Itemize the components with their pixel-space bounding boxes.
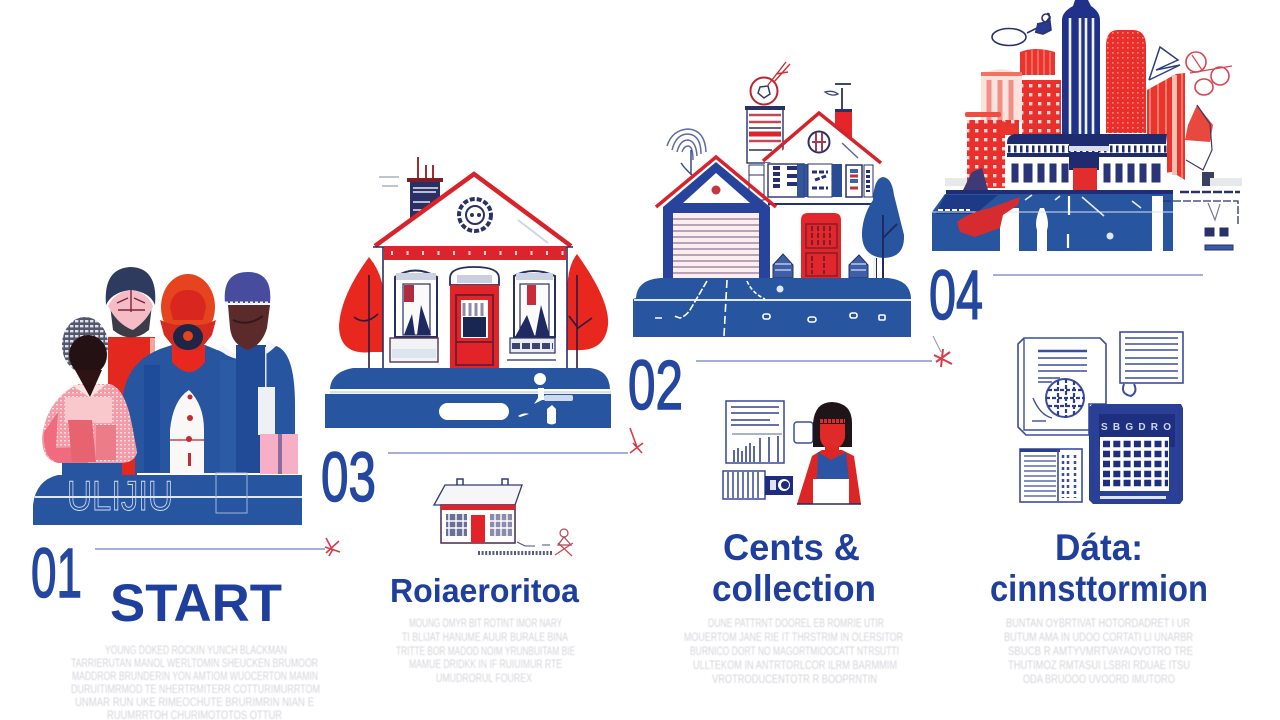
navy striped tower bbox=[1062, 0, 1100, 143]
red door bbox=[450, 267, 499, 369]
speech note bbox=[1120, 332, 1183, 396]
step 02 body text: BURNICO DORT NO MAGORTMIOOCATT NTRSUTTI bbox=[690, 646, 899, 658]
person: front left in pink jacket bbox=[42, 317, 137, 475]
left window bbox=[390, 270, 438, 362]
red splash bbox=[957, 197, 1020, 237]
connector 03 bbox=[388, 428, 643, 453]
right window bbox=[507, 271, 556, 360]
main house upper floor bbox=[763, 113, 881, 206]
grey horizon band bbox=[945, 178, 967, 186]
step 04 body text: BUNTAN OYBRTIVAT HOTORDADRET I UR bbox=[1006, 618, 1190, 630]
step 03 body text: TI BLIJAT HANUME AUUR BURALE BINA bbox=[402, 632, 568, 644]
connector 01 bbox=[95, 538, 340, 556]
calculator: SBGDRO bbox=[1101, 422, 1171, 433]
step 03 body text bbox=[396, 618, 575, 685]
step 04 body text bbox=[1004, 618, 1193, 686]
sketched balloon and climber bbox=[992, 13, 1051, 45]
step 03 body text: MAMUE DRIDKK IN IF RUIUIMUR RTE bbox=[409, 659, 562, 671]
person: centre with red helmet bbox=[123, 274, 236, 473]
red trees bbox=[339, 254, 608, 368]
red chimney and vane bbox=[825, 84, 852, 138]
step 03 number: 03 bbox=[321, 438, 376, 516]
person: right with purple cap bbox=[217, 272, 298, 474]
step 03 body text: UMUDRORUL FOUREX bbox=[436, 673, 532, 685]
path figure bbox=[518, 373, 573, 424]
step 01 heading: START bbox=[110, 574, 282, 633]
step 04 body text: SBUCB R AMTYVMRTVAYAOVOTRO TRE bbox=[1008, 646, 1193, 658]
step 03 body text: TRITTE BOR MADOD NOIM YRUNBUITAM BIE bbox=[396, 646, 575, 658]
sketch ornaments right bbox=[1149, 47, 1232, 95]
step 01 body text: DURUITIMRMOD TE NHERTRMITERR COTTURIMURRTOM bbox=[71, 684, 320, 696]
report with bar chart bbox=[726, 401, 784, 463]
step 01 body text bbox=[71, 645, 320, 720]
small chat card bbox=[794, 422, 813, 443]
blue base bbox=[33, 475, 302, 525]
navy hill bbox=[963, 168, 988, 190]
illustration: suburban house with garage bbox=[633, 62, 911, 337]
illustration: red and white house on blue base bbox=[325, 157, 611, 428]
illustration: group of four people on blue base bbox=[33, 267, 302, 525]
chimney bbox=[379, 157, 443, 218]
striped chimney bbox=[745, 106, 785, 200]
shirt panel with buttons bbox=[170, 390, 204, 473]
garage bbox=[656, 157, 776, 279]
calculator bbox=[1089, 404, 1183, 504]
step 02 body text: ULLTEKOM IN ANTRTORLCOR ILRM BARMMIM bbox=[693, 660, 897, 672]
step 04 heading: cinnsttormion bbox=[990, 568, 1208, 609]
connector 02 bbox=[696, 336, 952, 367]
data documents and calculator icon bbox=[1018, 332, 1183, 504]
red striped building right bbox=[1147, 73, 1185, 180]
white pill bbox=[439, 403, 509, 420]
step 02 heading: Cents & bbox=[723, 527, 860, 568]
right side sketched debris bbox=[1163, 192, 1240, 250]
small spire sketch bbox=[1185, 105, 1214, 186]
step 04 body text: THUTIMOZ RMTASUI LSBRI RDUAE ITSU bbox=[1008, 660, 1190, 672]
red frieze bbox=[384, 246, 566, 260]
circular emblem above chimney bbox=[750, 62, 790, 104]
step 02 body text: MOUERTOM JANE RIE IT THRSTRIM IN OLERSITOR bbox=[684, 632, 903, 644]
step 02 heading: collection bbox=[712, 568, 876, 609]
step 04 heading: Dáta: bbox=[1055, 527, 1143, 568]
red front door bbox=[801, 213, 841, 279]
step 02 heading bbox=[712, 527, 876, 609]
step 03 heading: Roiaeroritoa bbox=[390, 572, 580, 609]
blue road base bbox=[930, 190, 1173, 252]
connector 04 bbox=[993, 274, 1203, 276]
person: back left with dark cap and pink mask bbox=[106, 267, 155, 397]
civic hall bbox=[1005, 134, 1167, 190]
road markings bbox=[655, 280, 885, 336]
step 02 number: 02 bbox=[628, 346, 683, 424]
blue base bbox=[633, 278, 911, 337]
step 04 heading bbox=[990, 527, 1208, 609]
step 02 body text: VROTRODUCENTOTR R BOOPRNTIN bbox=[712, 674, 877, 686]
red grid building right bbox=[1106, 30, 1146, 133]
garden path and figure bbox=[478, 529, 573, 556]
red striped top building bbox=[1020, 49, 1055, 75]
red dotted building left bbox=[1022, 80, 1061, 136]
ledger and camera bbox=[723, 471, 793, 499]
globe document bbox=[1018, 338, 1106, 435]
woman analyst with charts icon bbox=[723, 401, 861, 504]
step 01 number: 01 bbox=[31, 534, 82, 612]
pink striped building bbox=[981, 69, 1022, 122]
small house icon bbox=[434, 479, 573, 556]
base lettering: ULIJIU bbox=[67, 472, 173, 519]
walls bbox=[383, 245, 567, 369]
woman bbox=[797, 402, 861, 504]
step 04 body text: ODA BRUOOO UVOORD IMUTORO bbox=[1023, 674, 1175, 686]
step 04 number: 04 bbox=[929, 256, 983, 334]
step 04 body text: BUTUM AMA IN UDOO CORTATI LI UNARBR bbox=[1004, 632, 1193, 644]
low red dotted building bbox=[965, 112, 1019, 188]
round emblem bbox=[459, 199, 491, 231]
step 03 body text: MOUNG OMYR BIT ROTINT IMOR NARY bbox=[409, 618, 562, 630]
step 01 body text: YOUNG DOKED ROCKIN YUNCH BLACKMAN bbox=[105, 645, 287, 657]
signal antenna bbox=[667, 129, 706, 175]
blue tree bbox=[862, 177, 904, 278]
step 01 body text: MADDROR BRUNDERIN YON AMTIOM WUOCERTON MAMIN bbox=[72, 671, 318, 683]
roof bbox=[373, 172, 573, 247]
step 02 body text bbox=[684, 618, 903, 686]
blue base bbox=[330, 368, 610, 389]
illustration: city skyline on blue road bbox=[930, 0, 1242, 252]
lower wall and shrubs bbox=[770, 205, 877, 279]
step 01 body text: TARRIERUTAN MANOL WERLTOMIN SHEUCKEN BRUMOOR bbox=[71, 658, 318, 670]
step 02 body text: DUNE PATTRNT DOOREL EB ROMRIE UTIR bbox=[708, 618, 884, 630]
step 01 body text: UNMAR RUN UKE RIMEOCHUTE BRURIMRIN NIAN E bbox=[75, 697, 314, 709]
spreadsheet bbox=[1020, 449, 1082, 502]
